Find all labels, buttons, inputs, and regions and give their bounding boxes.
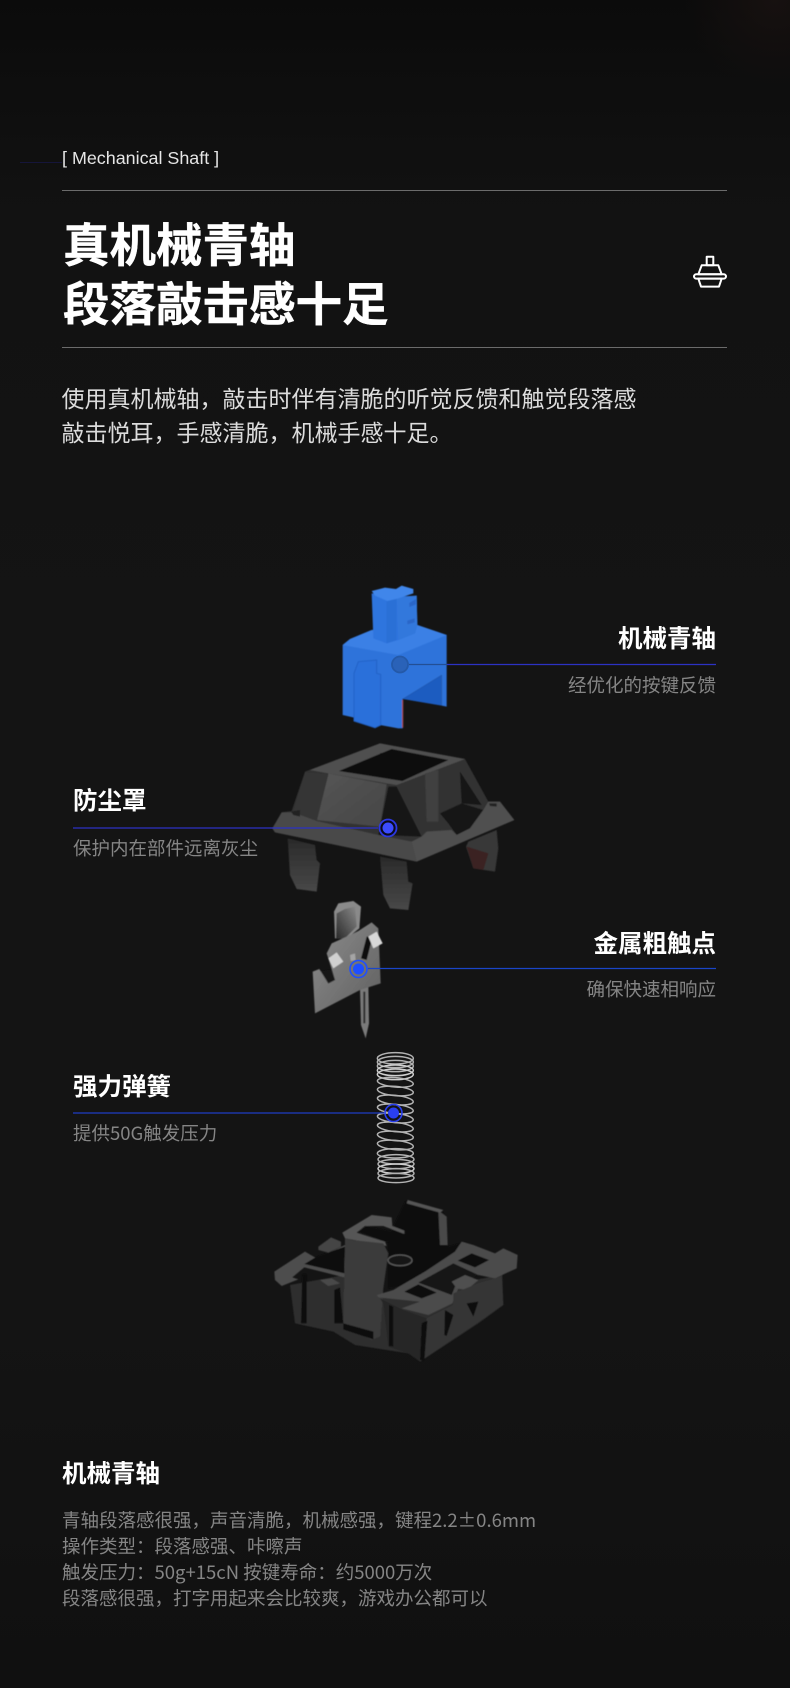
label: metal contact: 金属粗触点: [594, 925, 716, 960]
spring: [377, 1053, 414, 1183]
callout line and dot: metal contact: [350, 960, 716, 978]
callout line and dot: blue stem: [392, 656, 716, 672]
bottom heading: 机械青轴: [62, 1455, 160, 1490]
label: metal contact: 确保快速相响应: [586, 976, 716, 1002]
title: [63, 209, 388, 335]
metal contact: [313, 901, 383, 1038]
callout line and dot: dust cover: [73, 820, 396, 836]
label: blue stem: [568, 620, 716, 698]
description text: [62, 380, 636, 448]
title: 段落敲击感十足: [63, 268, 388, 335]
tag line: [ Mechanical Shaft ]: [62, 148, 219, 168]
description text: 使用真机械轴，敲击时伴有清脆的听觉反馈和触觉段落感: [62, 380, 636, 414]
bottom specification text: 青轴段落感很强，声音清脆，机械感强，键程2.2±0.6mm: [62, 1506, 536, 1532]
label: dust cover: [73, 782, 258, 861]
label: metal contact: [586, 925, 716, 1002]
dust cover housing: [272, 743, 514, 910]
description text: 敲击悦耳，手感清脆，机械手感十足。: [62, 414, 452, 448]
label: dust cover: 保护内在部件远离灰尘: [73, 835, 258, 861]
bottom specification text: [62, 1506, 536, 1611]
icon: keycap switch: [693, 256, 727, 288]
label: spring: 强力弹簧: [73, 1068, 171, 1103]
label: spring: 提供50G触发压力: [73, 1120, 217, 1146]
bottom specification text: 段落感很强，打字用起来会比较爽，游戏办公都可以: [62, 1585, 488, 1611]
label: spring: [73, 1068, 217, 1146]
bottom specification text: 操作类型：段落感强、咔嚓声: [62, 1533, 303, 1559]
label: dust cover: 防尘罩: [73, 782, 146, 817]
callout line and dot: spring: [73, 1104, 402, 1122]
title: 真机械青轴: [63, 209, 296, 276]
bottom housing: [274, 1200, 518, 1362]
blue stem: [343, 586, 447, 728]
label: blue stem: 经优化的按键反馈: [568, 672, 716, 698]
label: blue stem: 机械青轴: [618, 620, 716, 655]
bottom specification text: 触发压力：50g+15cN 按键寿命：约5000万次: [62, 1559, 432, 1585]
